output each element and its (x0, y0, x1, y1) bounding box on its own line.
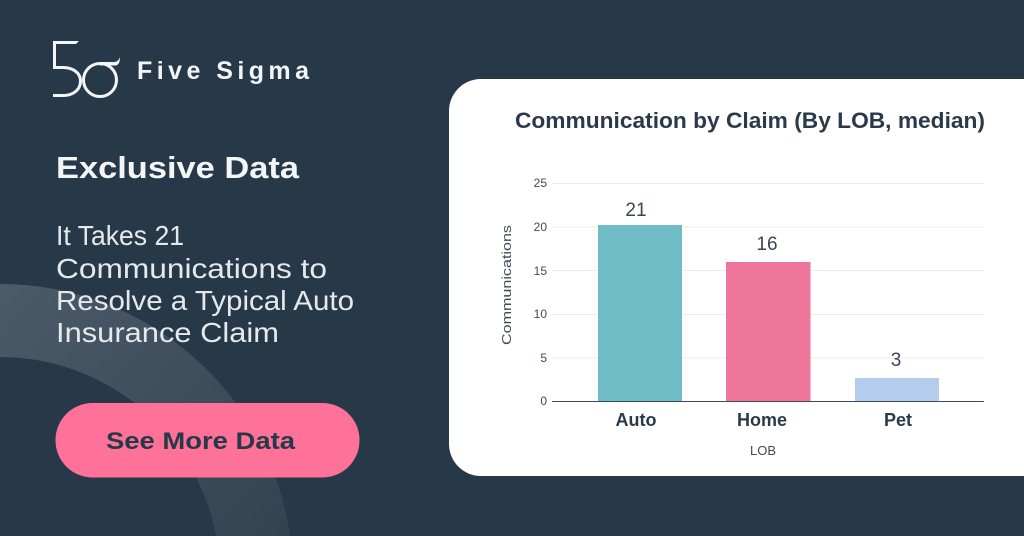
category labels (616, 410, 912, 430)
value labels: 3 (891, 350, 901, 371)
bar: Pet (855, 378, 939, 402)
y axis title: Communications (499, 224, 514, 345)
y axis tick labels: 15 (534, 264, 547, 278)
bar: Auto (598, 225, 682, 402)
body text: Communications to (56, 253, 327, 284)
body text: It Takes 21 (56, 220, 184, 251)
body text: Insurance Claim (56, 317, 279, 348)
category labels: Auto (616, 410, 656, 430)
y axis tick labels: 0 (540, 394, 547, 408)
y axis tick labels: 5 (540, 351, 547, 365)
body text (56, 220, 354, 348)
y axis tick labels (534, 176, 547, 408)
chart title: Communication by Claim (By LOB, median) (515, 108, 985, 133)
bar chart (499, 176, 984, 458)
decorative arc (0, 284, 290, 536)
y axis tick labels: 25 (534, 176, 547, 190)
value labels (625, 200, 901, 371)
value labels: 16 (756, 234, 778, 255)
category labels: Pet (884, 410, 912, 430)
logo wordmark: Five Sigma (137, 57, 310, 85)
logo (53, 41, 310, 96)
bar: Home (726, 262, 810, 402)
button label: See More Data (106, 428, 296, 455)
button (56, 403, 360, 478)
y axis tick labels: 20 (534, 220, 547, 234)
category labels: Home (737, 410, 787, 430)
heading: Exclusive Data (56, 150, 300, 185)
panel: chart card (449, 79, 1024, 476)
x axis line (552, 400, 984, 402)
body text: Resolve a Typical Auto (56, 285, 354, 316)
x axis title: LOB (750, 443, 776, 458)
value labels: 21 (625, 200, 647, 221)
grid lines (552, 184, 984, 358)
icon: fifty sigma mark (53, 41, 120, 96)
y axis tick labels: 10 (534, 307, 547, 321)
